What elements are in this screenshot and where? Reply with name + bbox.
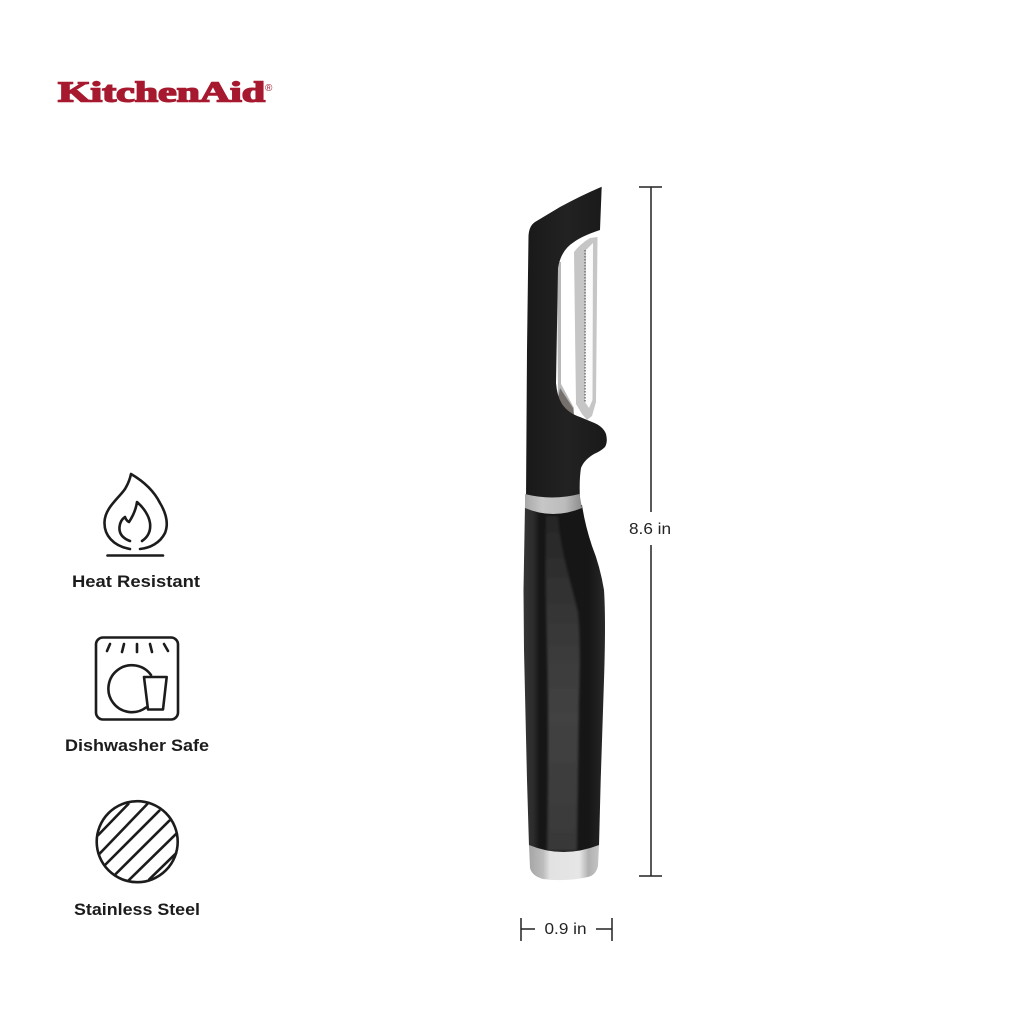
- peeler lower handle: [524, 505, 605, 853]
- peeler blade: [557, 237, 598, 420]
- feature: dishwasher safe: [65, 638, 209, 755]
- logo: KitchenAid: ®: [265, 83, 273, 94]
- icon: hatched circle: [97, 801, 178, 882]
- feature: heat resistant: [72, 474, 200, 591]
- icon: flame: [104, 474, 167, 556]
- icon: dishwasher: [96, 638, 178, 720]
- logo: KitchenAid: [58, 78, 273, 108]
- peeler metal end cap: [529, 845, 599, 880]
- dimension: width 0.9 in: [521, 918, 612, 941]
- peeler upper handle: [526, 187, 607, 500]
- peeler collar: [525, 494, 582, 514]
- dimension: height 8.6 in: 8.6 in: [629, 521, 671, 538]
- logo: KitchenAid: KitchenAid: [58, 78, 265, 108]
- dimension: height 8.6 in: [629, 187, 671, 876]
- label: Dishwasher Safe: [65, 736, 209, 755]
- label: Heat Resistant: [72, 572, 200, 591]
- feature: stainless steel: [74, 801, 200, 919]
- product: peeler: [524, 187, 607, 880]
- label: Stainless Steel: [74, 900, 200, 919]
- dimension: width 0.9 in: 0.9 in: [544, 921, 586, 938]
